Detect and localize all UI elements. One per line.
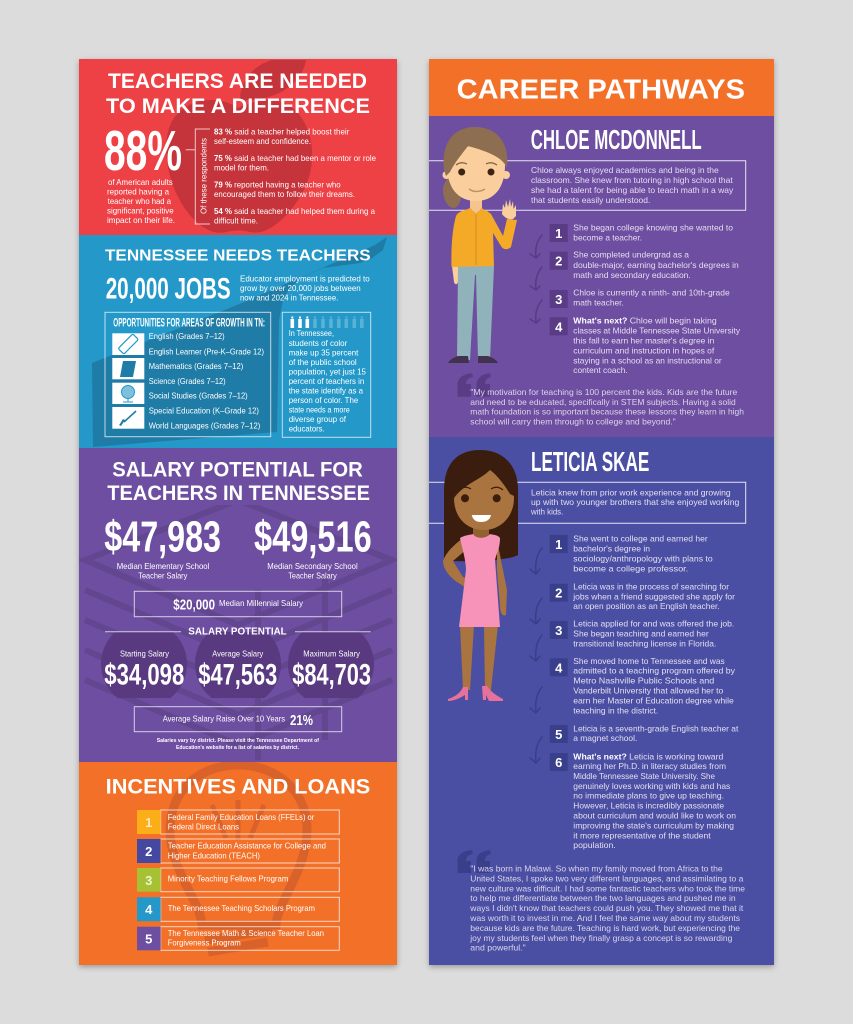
watermark: stacked books (85, 500, 392, 760)
header: career pathways: CAREER PATHWAYS (457, 73, 745, 104)
step 4: curriculum and instruction in hopes of (573, 345, 715, 355)
icon: book (112, 358, 144, 379)
list item 5: The Tennessee Math & Science Teacher Loan (168, 928, 324, 938)
text: american adults: impact on their life. (107, 215, 175, 225)
quote text: was worth it to invest in me. And I feel the same way about my students (469, 913, 740, 923)
box: salary raise: Average Salary Raise Over 10 Years (163, 714, 285, 724)
stat: secondary salary: Median Secondary School (267, 561, 358, 571)
name heading: LETICIA SKAE (531, 446, 649, 477)
step arrows (530, 235, 542, 323)
icon: people row (290, 316, 364, 328)
step 3: 3 (555, 292, 562, 307)
icon: light bulb watermark (170, 765, 307, 952)
step 1: become a college professor. (573, 563, 688, 573)
icon: quotation mark (458, 850, 491, 873)
respondent statistics (214, 126, 376, 226)
step 4: She moved home to Tennessee and was (573, 656, 725, 666)
step arrows (530, 548, 542, 763)
text: american adults: of American adults (108, 177, 173, 187)
intro box: classroom. She knew from tutoring in high school that (531, 175, 733, 185)
step 1: 1 (555, 537, 562, 552)
step 4: classes at Middle Tennessee State University (573, 325, 741, 335)
icon: paintbrush (112, 407, 144, 429)
text: employment growth: now and 2024 in Tennessee. (240, 292, 338, 302)
list item 5 (137, 927, 339, 950)
quote text: to help me differentiate between the two languages and pushed me in (470, 893, 736, 903)
box: opportunities (105, 312, 271, 437)
intro box: with kids. (530, 507, 563, 517)
quote text: United States, I spoke two very different languages, and assimilating to a (470, 873, 744, 883)
step 2: She completed undergrad as a (573, 250, 689, 260)
quote text: "My motivation for teaching is 100 percent the kids. Kids are the future (470, 387, 738, 397)
stat: secondary salary: $49,516 (254, 513, 372, 562)
box: salary raise: 21% (290, 712, 313, 729)
text: american adults: significant, positive (107, 206, 174, 216)
step 2: math and secondary education. (573, 270, 691, 280)
step 3: Leticia applied for and was offered the job. (573, 619, 734, 629)
text: american adults: reported having a (107, 186, 169, 196)
text: diversity: person of color. The (289, 395, 359, 405)
text: employment growth: grow by over 20,000 jobs between (240, 283, 361, 293)
step 4 (550, 315, 741, 375)
step 4: What's next? Chloe will begin taking (573, 315, 717, 325)
panel: leticia skae (429, 437, 774, 965)
step 4: admitted to a teaching program offered by (573, 666, 736, 676)
step 3: Chloe is currently a ninth- and 10th-grade (573, 288, 730, 298)
text: diversity: In Tennessee, (289, 328, 334, 338)
quote text: and powerful." (470, 943, 526, 953)
quote text: new culture was difficult. I had some fantastic teachers who took the time (470, 883, 745, 893)
step 2: 2 (555, 254, 562, 269)
text: diversity: educators. (289, 423, 325, 433)
step 1: She went to college and earned her (573, 534, 708, 544)
step 6: about curriculum and would like to work on (573, 810, 736, 820)
respondent statistics: 83 % said a teacher helped boost their (214, 126, 350, 136)
list: growth areas: World Languages (Grades 7–12) (149, 421, 261, 431)
circles: salary range: Maximum Salary (303, 649, 361, 659)
panel: tennessee needs teachers (79, 235, 397, 448)
text: diversity: the state identify as a (289, 386, 363, 396)
stat: elementary salary: $47,983 (104, 513, 221, 562)
panel: incentives and loans (79, 762, 397, 965)
heading: INCENTIVES AND LOANS (106, 775, 370, 798)
step 1: sociology/anthropology with plans to (573, 553, 713, 563)
big stat: 88%: 88% (104, 119, 182, 183)
bracket: of these respondents: Of these respondents (198, 138, 208, 214)
heading (106, 69, 370, 118)
respondent statistics: model for them. (214, 163, 269, 173)
intro box: Chloe always enjoyed academics and being in the (531, 165, 719, 175)
step 4: 4 (555, 660, 563, 675)
step 5: a magnet school. (573, 733, 637, 743)
box: millennial salary: Median Millennial Salary (219, 598, 304, 608)
step 3: 3 (555, 623, 562, 638)
respondent statistics: difficult time. (214, 216, 258, 226)
list item 1: Federal Family Education Loans (FFELs) or (168, 812, 315, 822)
step 6: earning her Ph.D. in literacy studies from (573, 761, 726, 771)
circles: salary range (101, 632, 374, 698)
circles: salary range: $84,703 (292, 658, 371, 691)
name heading: CHLOE MCDONNELL (531, 124, 702, 155)
list item 2: Higher Education (TEACH) (168, 850, 260, 860)
list item 2 (137, 839, 339, 863)
step 2: jobs when a friend suggested she apply for (572, 591, 735, 601)
panel: teachers are needed (79, 59, 397, 235)
quote text: because kids are the future. Teaching is hard work, but experiencing the (470, 923, 740, 933)
quote text: and need to be educated, specifically in STEM subjects. Having a solid (470, 397, 736, 407)
quote text: ways I didn't know that teachers could push you. They showed me that it (469, 903, 744, 913)
text: diversity (289, 328, 366, 433)
intro box: up with two younger brothers that she enjoyed working (531, 497, 740, 507)
icon: ruler (112, 333, 144, 355)
stat: elementary salary: Teacher Salary (138, 570, 188, 580)
text: employment growth: Educator employment is predicted to (240, 274, 370, 284)
step 6: improving the state's curriculum by making (573, 820, 734, 830)
step 1 (550, 534, 713, 573)
text: diversity: diverse group of (289, 414, 347, 424)
text: diversity: make up 35 percent (289, 348, 359, 358)
quote text: math foundation is so important because these lessons they learn in high (470, 407, 744, 417)
step 4: content coach. (573, 365, 628, 375)
step 4: 4 (555, 319, 563, 334)
respondent statistics: encouraged them to follow their dreams. (214, 189, 355, 199)
quote text: "I was born in Malawi. So when my family moved from Africa to the (470, 863, 723, 873)
list item 1: Federal Direct Loans (168, 821, 239, 831)
intro box (429, 161, 746, 210)
footnote: Salaries vary by district. Please visit the Tennessee Department of (157, 738, 319, 744)
box: opportunities: OPPORTUNITIES FOR AREAS OF GROWTH IN TN: (113, 318, 265, 330)
list item 2: Teacher Education Assistance for College and (168, 840, 326, 850)
stat: elementary salary (104, 513, 221, 580)
big stat: 20,000 jobs: 20,000 JOBS (106, 272, 231, 305)
respondent statistics: 54 % said a teacher had helped them during a (214, 206, 375, 216)
step 1: She began college knowing she wanted to (573, 222, 733, 232)
box: salary raise (134, 707, 342, 732)
circles: salary range: Average Salary (212, 649, 264, 659)
quote text: joy my students feel when they finally grasp a concept is so rewarding (469, 933, 733, 943)
footnote (157, 738, 319, 751)
heading: TEACHERS ARE NEEDED (108, 69, 367, 93)
step 6: it more representative of the student (573, 830, 711, 840)
quote text (469, 863, 745, 953)
step 1: become a teacher. (573, 232, 642, 242)
step 1 (550, 222, 733, 242)
heading: TENNESSEE NEEDS TEACHERS (105, 247, 371, 264)
list item 5: Forgiveness Program (168, 937, 241, 947)
text: american adults: teacher who had a (108, 196, 171, 206)
step 2: an open position as an English teacher. (573, 601, 720, 611)
step 4: teaching in the district. (573, 705, 658, 715)
list: growth areas: Science (Grades 7–12) (149, 376, 226, 386)
text: diversity: state needs a more (289, 405, 350, 415)
list item 3 (137, 868, 339, 892)
map: tennessee watermark (92, 237, 387, 447)
text: employment growth (240, 274, 370, 302)
quote text (470, 387, 744, 426)
text: diversity: students of color (289, 338, 348, 348)
intro box (429, 482, 746, 523)
box: millennial salary (134, 591, 342, 617)
heading: TO MAKE A DIFFERENCE (106, 94, 370, 118)
step 5: Leticia is a seventh-grade English teacher at (573, 723, 739, 733)
figure: leticia (443, 450, 518, 701)
step 6 (550, 751, 736, 850)
step 2: Leticia was in the process of searching for (573, 581, 729, 591)
step 6: population. (573, 840, 616, 850)
list item 4 (137, 897, 339, 921)
step 6: 6 (555, 755, 562, 770)
panel: chloe mcdonnell (429, 116, 774, 437)
step 5: 5 (555, 727, 562, 742)
text: diversity: population, yet just 15 (289, 367, 366, 377)
quote text: school will carry them through to college and beyond." (470, 416, 676, 426)
step 4: Vanderbilt University that allowed her to (573, 686, 724, 696)
list item 5: 5 (145, 932, 152, 946)
list: growth areas: Mathematics (Grades 7–12) (149, 361, 244, 371)
list: growth areas: Social Studies (Grades 7–12) (149, 391, 248, 401)
step 6: no immediate plans to give up teaching. (573, 791, 724, 801)
heading (107, 458, 370, 505)
box: students of color (282, 312, 371, 437)
step 6: However, Leticia is incredibly passionate (573, 801, 724, 811)
step 2: 2 (555, 586, 562, 601)
respondent statistics: self-esteem and confidence. (214, 136, 311, 146)
heading: TEACHERS IN TENNESSEE (107, 481, 370, 505)
list: growth areas: Special Education (K–Grade 12) (149, 405, 259, 415)
step 3: She began teaching and earned her (573, 628, 709, 638)
list: growth areas (149, 331, 264, 431)
step 5 (550, 723, 739, 743)
list item 1 (137, 810, 339, 834)
step 3 (550, 288, 730, 308)
heading: SALARY POTENTIAL FOR (112, 458, 363, 482)
stat: secondary salary (254, 513, 372, 580)
step 3 (550, 619, 734, 648)
circles: salary range: $47,563 (198, 658, 277, 691)
stat: secondary salary: Teacher Salary (288, 570, 337, 580)
step 3: math teacher. (573, 297, 624, 307)
intro box: Leticia knew from prior work experience and growing (531, 487, 731, 497)
list: growth areas: English (Grades 7–12) (149, 331, 225, 341)
list item 2: 2 (145, 844, 152, 859)
text: diversity: of the public school (289, 357, 357, 367)
subheading: salary potential: SALARY POTENTIAL (188, 626, 287, 638)
icon: quotation mark (458, 373, 491, 397)
step 2 (550, 250, 739, 280)
step 4 (550, 656, 736, 715)
circles: salary range: Starting Salary (120, 649, 170, 659)
step 1: bachelor's degree in (573, 543, 650, 553)
box: millennial salary: $20,000 (173, 596, 215, 613)
step 1: 1 (555, 226, 562, 241)
step 6: genuinely loves working with kids and has (573, 781, 730, 791)
list item 1: 1 (145, 815, 152, 830)
text: american adults (107, 177, 175, 225)
list item 3: Minority Teaching Fellows Program (168, 873, 288, 883)
step 4: Metro Nashville Public Schools and (573, 676, 715, 686)
circles: salary range: $34,098 (104, 658, 184, 691)
step 4: earn her Master of Education degree while (573, 695, 734, 705)
list item 3: 3 (145, 873, 152, 888)
respondent statistics: 79 % reported having a teacher who (214, 179, 341, 189)
step 6: What's next? Leticia is working toward (573, 751, 724, 761)
icon: globe (112, 383, 144, 404)
panel: salary potential (79, 448, 397, 762)
step 3: transitional teaching license in Florida. (573, 638, 716, 648)
text: diversity: percent of teachers in (289, 376, 365, 386)
header: career pathways (429, 59, 774, 116)
stat: elementary salary: Median Elementary School (117, 561, 209, 571)
list item 4: The Tennessee Teaching Scholars Program (168, 903, 315, 913)
list: growth areas: English Learner (Pre-K–Grade 12) (149, 346, 264, 356)
figure: chloe (442, 127, 517, 363)
icon: apple watermark (166, 60, 312, 233)
step 6: Middle Tennessee State University. She (573, 771, 715, 781)
step 4: this fall to earn her master's degree in (573, 335, 715, 345)
step 4: staying in a school as an instructional or (573, 355, 722, 365)
footnote: Education's website for a list of salaries by district. (176, 745, 299, 751)
list item 4: 4 (145, 902, 153, 917)
step 2 (550, 581, 735, 611)
bracket: of these respondents (186, 129, 210, 224)
intro box: she had a talent for being able to teach math in a way (531, 185, 734, 195)
intro box: that students easily understood. (531, 195, 650, 205)
step 2: double-major, earning bachelor's degrees in (573, 260, 739, 270)
respondent statistics: 75 % said a teacher had been a mentor or role (214, 153, 376, 163)
